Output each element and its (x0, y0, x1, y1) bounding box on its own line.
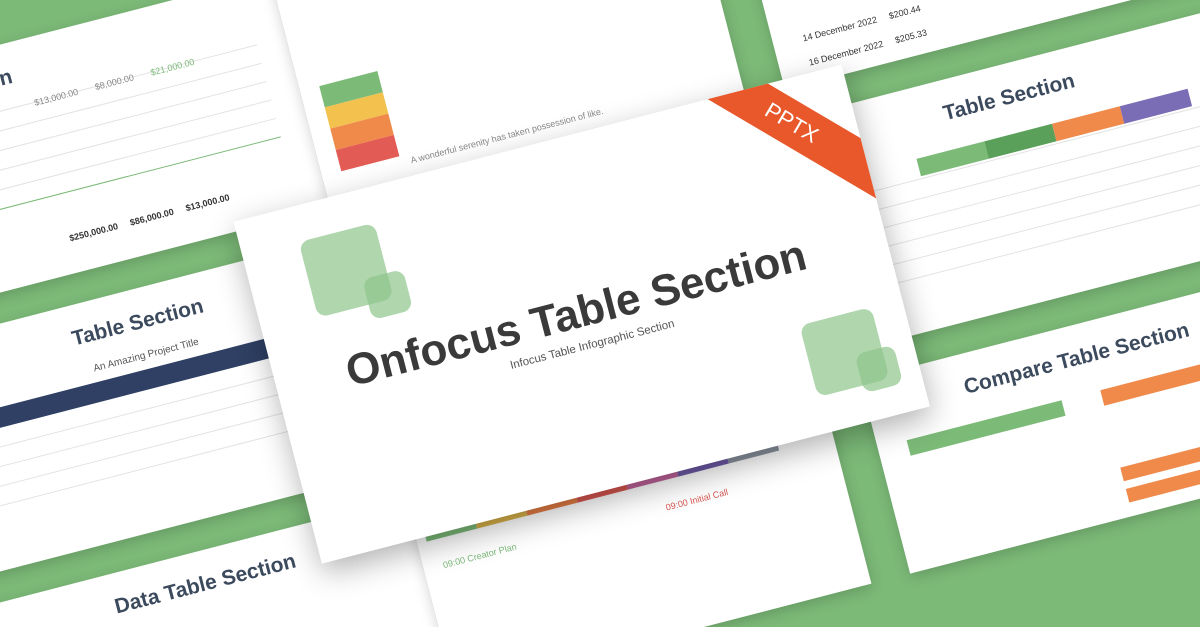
subtitle: Infocus Table Infographic Section (509, 318, 676, 372)
slide: gantt chart (270, 0, 746, 207)
slide: top-right dates: 16 December 2022 $205.33 (808, 27, 928, 68)
icon: squares top-left (300, 224, 411, 318)
slide: gantt chart: A wonderful serenity has taken possession of like. (410, 106, 604, 165)
slide: left project table (0, 236, 398, 576)
slide: left project table: Table Section (69, 295, 206, 351)
title: Onfocus Table Section (341, 231, 811, 396)
slide: top-right dates (725, 0, 1200, 90)
slide: left project table: An Amazing Project Title (92, 337, 200, 374)
slide: top-left financial table: $13,000.00 $8,000.00 $21,000.00 (33, 57, 196, 108)
slide: calendar: 09:00 Initial Call (665, 487, 729, 513)
icon: squares bottom-right (802, 309, 902, 395)
slide: top-left financial table (0, 0, 330, 315)
slide: top-right dates: 14 December 2022 $200.44 (801, 3, 922, 43)
slide: calendar (405, 390, 871, 627)
slide: compare table: Compare Table Section (961, 318, 1192, 399)
slide: compare table (860, 272, 1200, 574)
slide: calendar: 09:00 Creator Plan (442, 542, 518, 570)
slide: right table section: Table Section (941, 69, 1077, 125)
slide: top-left financial table: $250,000.00 $86,000.00 $13,000.00 (68, 192, 231, 243)
center card (234, 65, 930, 564)
slide: data table (0, 498, 455, 627)
slide: right table section (792, 11, 1200, 351)
ribbon: PPTX: PPTX (761, 97, 823, 148)
slide: data table: Data Table Section (112, 550, 298, 618)
ribbon: PPTX (681, 46, 902, 200)
